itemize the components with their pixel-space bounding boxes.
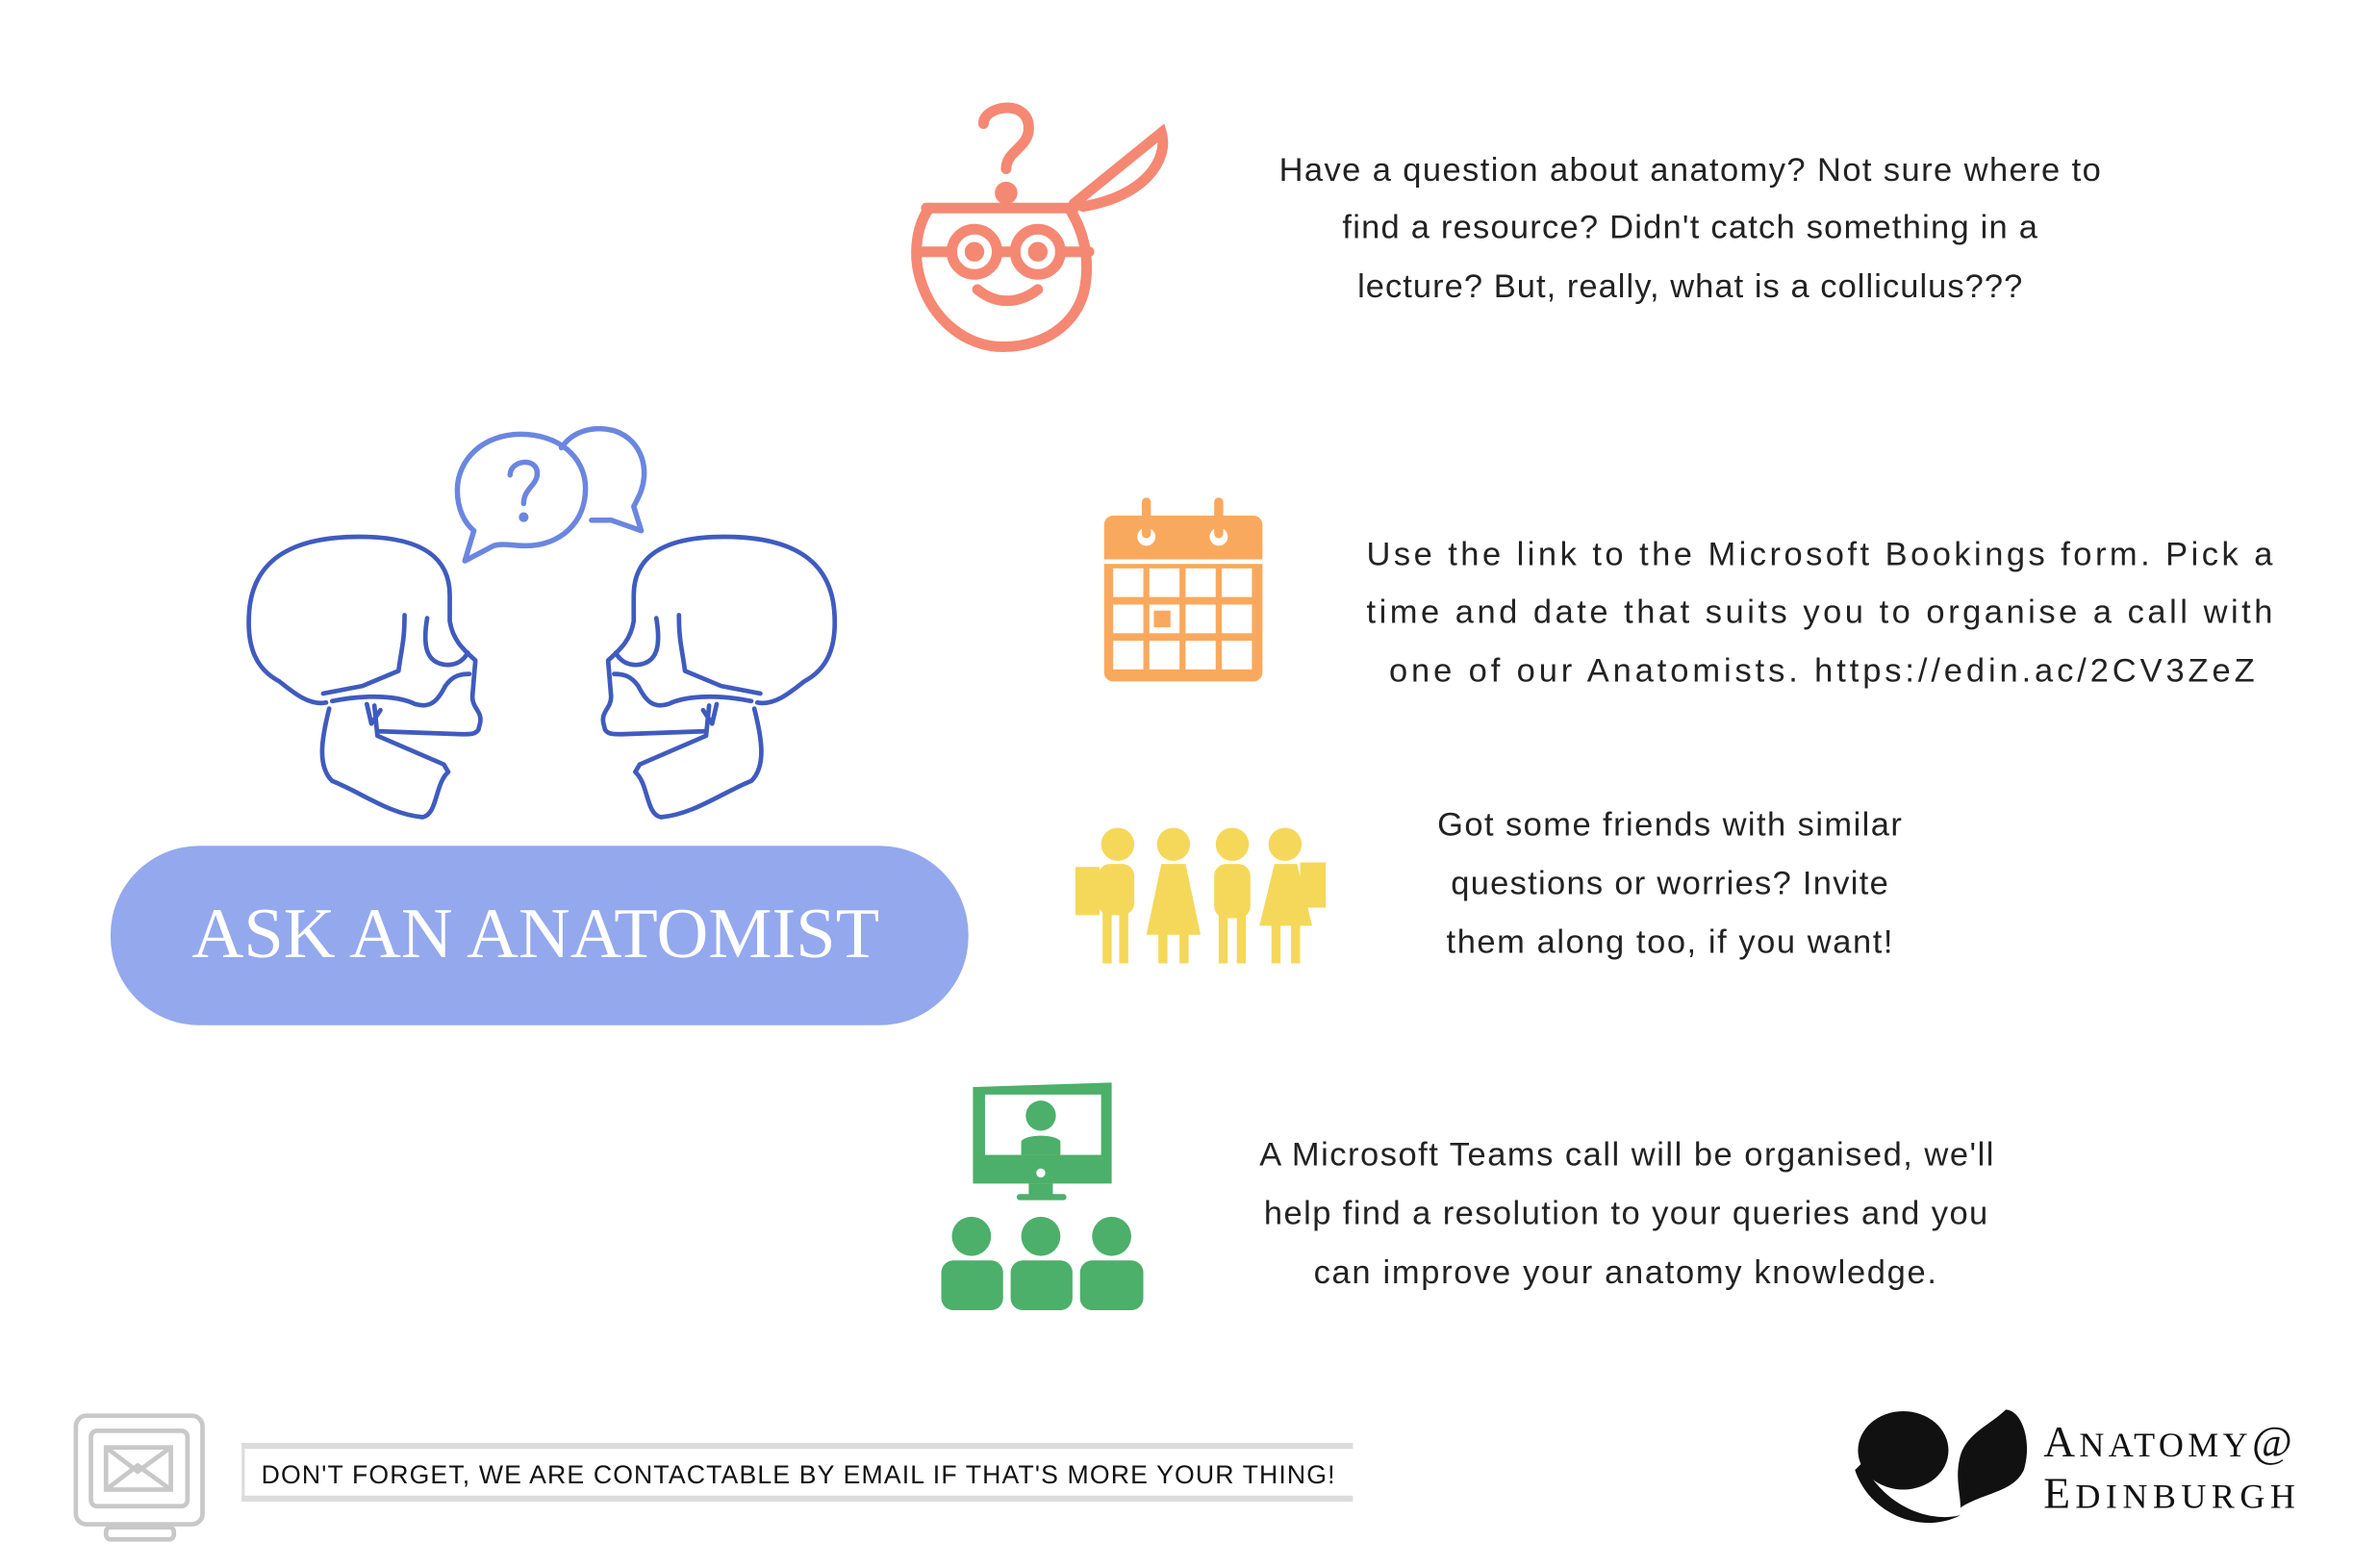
logo: Anatomy@Edinburgh [1855, 1409, 2295, 1523]
icon: calendar [1104, 497, 1262, 681]
icon: teams video call [941, 1082, 1144, 1310]
logo: Anatomy@Edinburgh: ANATOMY@ [2043, 1417, 2292, 1466]
text: bookings: one of our Anatomists. https://edin.ac/2CV3ZeZ [1389, 652, 2255, 689]
banner: email reminder: DON'T FORGET, WE ARE CONTACTABLE BY EMAIL IF THAT'S MORE YOUR THING! [262, 1460, 1335, 1489]
icon: skulls with speech bubbles [249, 429, 835, 817]
text: teams call: help find a resolution to your queries and you [1264, 1196, 1987, 1232]
icon: speech bubbles [457, 429, 645, 561]
icon: curious head with glasses [917, 108, 1163, 346]
text: question intro: lecture? But, really, what is a colliculus??? [1357, 268, 2022, 305]
icon: email computer [76, 1416, 203, 1539]
icon: group of friends [1075, 827, 1326, 964]
text: friends: them along too, if you want! [1447, 924, 1892, 961]
text: question intro: find a resource? Didn't catch something in a [1342, 210, 2038, 246]
logo: Anatomy@Edinburgh: EDINBURGH [2043, 1468, 2295, 1517]
title pill: ASK AN ANATOMIST: ASK AN ANATOMIST [192, 894, 879, 973]
text: teams call: A Microsoft Teams call will be organised, we'll [1259, 1137, 1993, 1174]
text: question intro: Have a question about anatomy? Not sure where to [1279, 152, 2101, 189]
title pill: ASK AN ANATOMIST [111, 846, 969, 1025]
icon: left skull [249, 537, 480, 817]
text: friends: questions or worries? Invite [1451, 865, 1888, 901]
text: friends [1437, 806, 1902, 961]
text: bookings [1366, 537, 2273, 689]
text: friends: Got some friends with similar [1437, 806, 1902, 843]
text: teams call [1259, 1137, 1993, 1291]
banner: email reminder [241, 1443, 1353, 1502]
text: bookings: time and date that suits you to organise a call with [1366, 594, 2272, 630]
text: question intro [1279, 152, 2101, 305]
icon: right skull [603, 537, 835, 817]
text: bookings: Use the link to the Microsoft Bookings form. Pick a [1366, 537, 2273, 573]
text: teams call: can improve your anatomy knowledge. [1314, 1254, 1936, 1291]
